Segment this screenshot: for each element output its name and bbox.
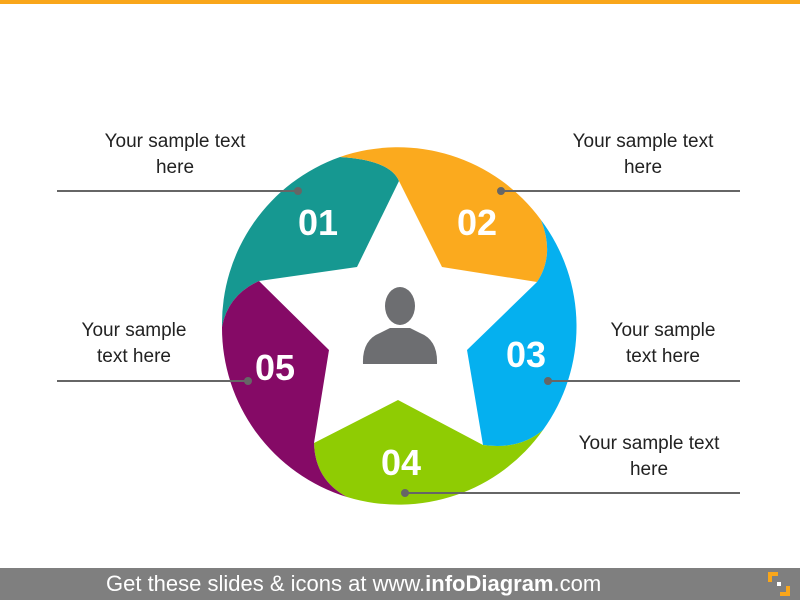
numbers: 04 [381, 442, 421, 483]
text 02: Your sample text [573, 131, 713, 152]
icon: person [363, 287, 437, 364]
text 02 [573, 131, 714, 178]
segment 05 [222, 281, 347, 497]
text 01 [105, 131, 246, 178]
numbers: 02 [457, 202, 497, 243]
text 01: here [156, 157, 194, 178]
segment 02 [340, 147, 547, 282]
segment 04 [314, 400, 543, 505]
icon: logo [768, 572, 790, 596]
text 04 [579, 433, 720, 480]
text 05: Your sample [82, 320, 186, 341]
numbers: 05 [255, 347, 295, 388]
text 03: Your sample [611, 320, 715, 341]
text 01: Your sample text [105, 131, 245, 152]
segment 01 [222, 157, 399, 327]
numbers: 01 [298, 202, 338, 243]
numbers [255, 202, 546, 483]
footer [0, 568, 800, 600]
text 04: Your sample text [579, 433, 719, 454]
numbers: 03 [506, 334, 546, 375]
text 02: here [624, 157, 662, 178]
text 03 [611, 320, 715, 367]
text 03: text here [626, 346, 700, 367]
connector lines [57, 188, 740, 496]
text 05 [82, 320, 186, 367]
segment 03 [467, 220, 577, 446]
text 05: text here [97, 346, 171, 367]
text 04: here [630, 459, 668, 480]
top bar [0, 0, 800, 4]
footer: Get these slides & icons at www.infoDiagram.com [106, 571, 601, 596]
